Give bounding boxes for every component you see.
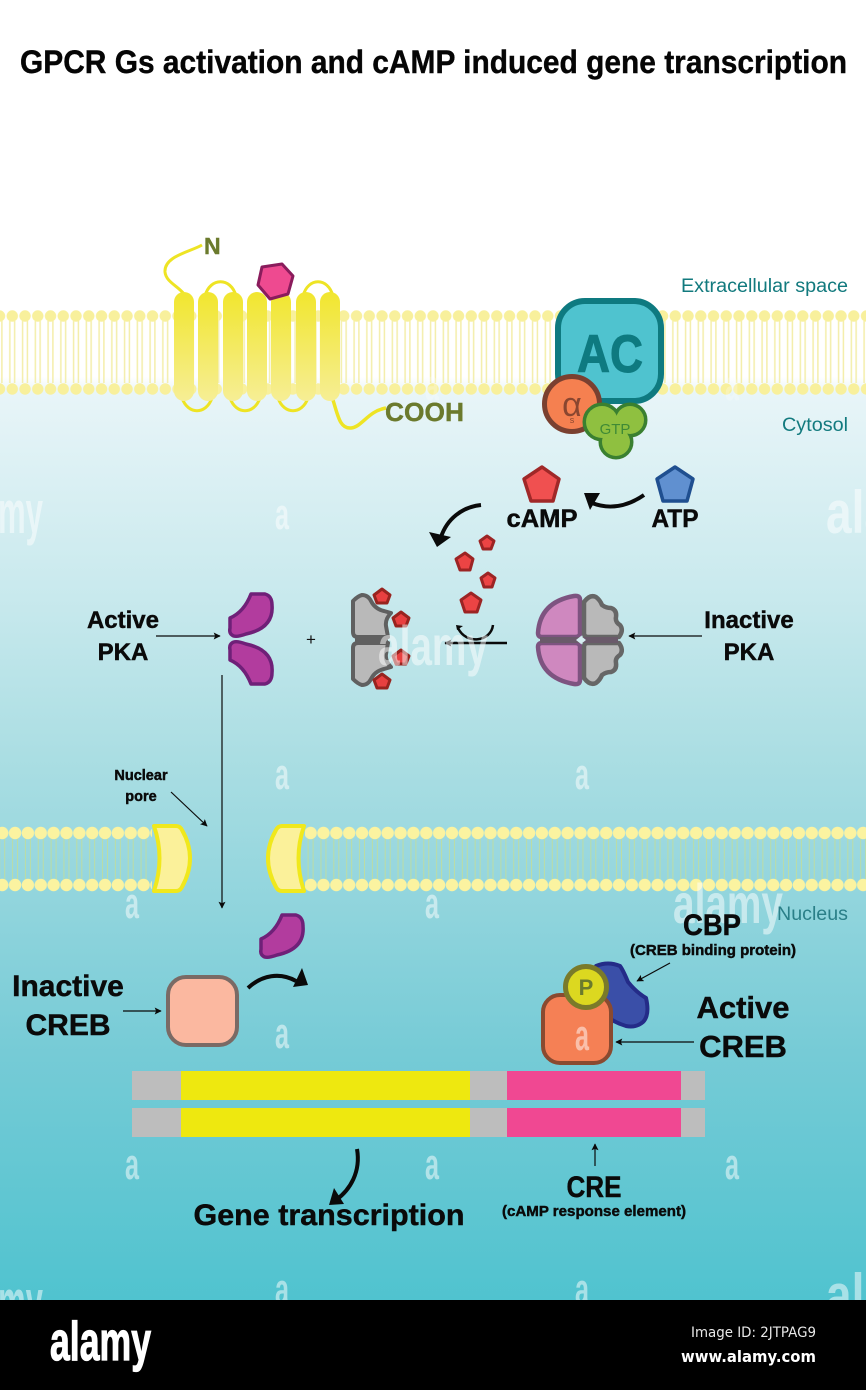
G alpha s subunit: α (562, 386, 582, 424)
watermarks: a (425, 1140, 439, 1189)
phosphate: P (579, 975, 593, 1000)
CBP protein (596, 964, 647, 1026)
watermarks: a (575, 750, 589, 799)
watermarks (0, 361, 866, 1335)
arrow: ATP to cAMP (584, 493, 644, 510)
G alpha s subunit (544, 376, 600, 432)
label: ATP: ATP (652, 505, 698, 533)
label: CBP: CBP (683, 909, 741, 942)
plasma membrane (0, 309, 866, 396)
adenylyl cyclase (558, 301, 661, 401)
watermarks: alamy (673, 872, 783, 935)
regulatory subunits bound to cAMP (353, 589, 409, 688)
label: CBP full name: (CREB binding protein) (630, 942, 796, 959)
footer bar: www.alamy.com (681, 1347, 816, 1366)
ATP molecule (657, 467, 693, 501)
G alpha s subunit: s (570, 415, 575, 425)
arrow: inactive CREB (123, 1010, 161, 1012)
arrow: active CREB (616, 1041, 694, 1043)
label: nucleus: Nucleus (777, 904, 848, 925)
label: active CREB: CREB (699, 1029, 787, 1064)
arrow: CRE (594, 1144, 596, 1166)
inactive CREB (168, 977, 237, 1045)
arrow: cAMP to PKA (429, 505, 481, 547)
footer bar: Image ID: 2JTPAG9 (691, 1325, 816, 1341)
label: CRE full name: (cAMP response element) (502, 1203, 686, 1220)
watermarks: my (0, 479, 43, 546)
reversible reaction arrow (445, 625, 507, 643)
phosphate (566, 966, 606, 1008)
active CREB (543, 995, 611, 1063)
watermarks: a (275, 1265, 289, 1314)
label: CRE: CRE (566, 1171, 622, 1204)
cAMP molecule (524, 467, 559, 501)
arrow: CBP (637, 963, 670, 981)
plus sign: + (306, 630, 316, 649)
arrow: inactive PKA (629, 635, 702, 637)
watermarks: my (0, 1268, 43, 1335)
watermarks: a (275, 1009, 289, 1058)
arrow: active PKA (156, 635, 220, 637)
watermarks: a (425, 879, 439, 928)
watermarks: a (125, 1140, 139, 1189)
active CREB: a (575, 1011, 589, 1060)
GPCR receptor (165, 245, 386, 428)
label: COOH: COOH (385, 397, 464, 427)
footer bar: alamy (50, 1310, 151, 1372)
watermarks: a (275, 490, 289, 539)
watermarks: alamy (378, 614, 488, 677)
watermarks: a (575, 1265, 589, 1314)
label: cytosol: Cytosol (782, 415, 848, 436)
label: active PKA: PKA (98, 639, 148, 666)
free cAMP molecules (456, 536, 495, 612)
label: extracellular space: Extracellular space (681, 276, 848, 297)
label: gene transcription: Gene transcription (194, 1199, 464, 1232)
arrow: PKA into nucleus (221, 675, 223, 908)
active PKA catalytic subunits (230, 594, 272, 684)
label: cAMP: cAMP (506, 505, 578, 533)
label: active PKA: Active (87, 607, 159, 634)
label: inactive CREB: Inactive (12, 970, 124, 1003)
nuclear membrane (0, 826, 866, 892)
nuclear pore left (154, 826, 190, 891)
inactive PKA complex (538, 596, 622, 684)
adenylyl cyclase: AC (577, 325, 643, 384)
watermarks: a (725, 361, 739, 410)
translocated PKA subunit (261, 915, 303, 957)
label: inactive PKA: PKA (724, 639, 774, 666)
watermarks: a (275, 750, 289, 799)
watermarks: a (125, 879, 139, 928)
arrow: transcription (329, 1149, 358, 1205)
arrow: activation of CREB (248, 968, 308, 988)
footer bar (0, 1300, 866, 1390)
label: nuclear pore: Nuclear (114, 768, 168, 784)
watermarks: a (725, 1140, 739, 1189)
ligand hexagon (258, 264, 293, 299)
nuclear pore right (268, 826, 304, 891)
DNA double strand (132, 1071, 705, 1137)
label: active CREB: Active (696, 990, 790, 1025)
GTP: GTP (600, 421, 630, 438)
GTP (585, 405, 645, 457)
label: nuclear pore: pore (125, 789, 157, 805)
label: N terminus: N (204, 233, 221, 259)
label: inactive CREB: CREB (25, 1009, 111, 1042)
arrow: nuclear pore (171, 792, 207, 826)
watermarks: a (425, 361, 439, 410)
label: inactive PKA: Inactive (704, 607, 794, 634)
